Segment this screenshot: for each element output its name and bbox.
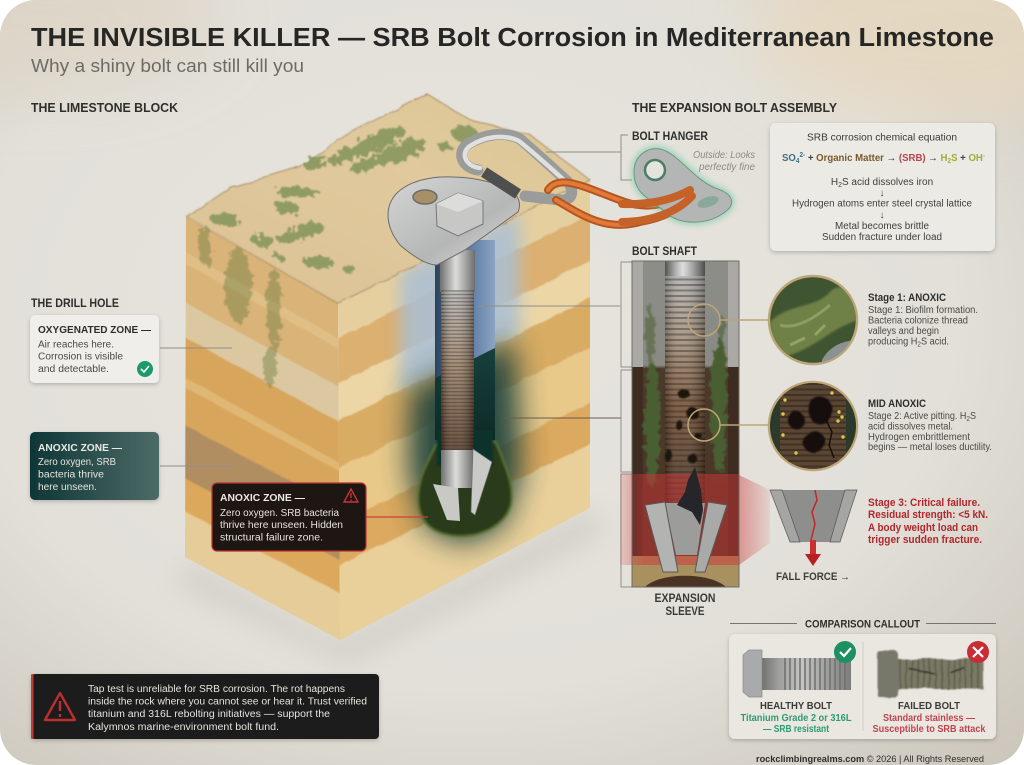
block shadow — [178, 512, 600, 660]
equation formula: 2 — [947, 158, 951, 165]
panel: anoxic zone left: Zero oxygen, SRB — [38, 457, 116, 468]
reaction chain: Metal becomes brittle — [835, 221, 929, 232]
note: outside looks fine — [693, 149, 756, 173]
panel: tap test warning: titanium and 316L rebolting initiatives — support the — [88, 709, 330, 720]
stage 3 text: Stage 3: Critical failure. — [868, 497, 980, 509]
icon: failed cross — [967, 641, 989, 663]
stage 2 text: S — [970, 411, 976, 422]
stage 3 text — [868, 497, 988, 546]
shaft outline — [632, 261, 739, 587]
stage 3 text: A body weight load can — [868, 522, 978, 534]
equation formula: SO — [782, 152, 796, 164]
failed bolt text: Susceptible to SRB attack — [872, 724, 986, 735]
label: expansion sleeve — [654, 593, 716, 618]
panel: anoxic zone callout — [212, 483, 366, 551]
panel: oxygenated zone: Air reaches here. — [38, 340, 114, 350]
equation formula: + — [805, 152, 816, 164]
panel: oxygenated zone — [30, 315, 159, 383]
callout lens links — [688, 304, 770, 441]
panel: anoxic zone left — [30, 432, 159, 500]
biofilm on walls — [644, 303, 727, 487]
equation formula: + OH — [960, 152, 984, 164]
panel: oxygenated zone: and detectable. — [38, 364, 109, 375]
stage 1 text: S acid. — [921, 336, 949, 348]
rock walls — [632, 261, 739, 587]
panel: anoxic zone callout: Zero oxygen. SRB bacteria — [220, 508, 339, 519]
fracture detail — [770, 490, 857, 542]
corrosion pits — [665, 389, 702, 463]
equation formula: 2- — [799, 152, 806, 159]
reaction chain: H — [831, 177, 838, 188]
stage 3 text: Residual strength: <5 kN. — [868, 509, 988, 521]
moss patches — [210, 121, 477, 273]
panel: tap test warning: inside the rock where you cannot see or hear it. Trust verified — [88, 696, 367, 708]
stage 1 text: Stage 1: ANOXIC — [868, 292, 946, 304]
stage 2 text: MID ANOXIC — [868, 398, 926, 410]
reaction chain: Hydrogen atoms enter steel crystal lattice — [792, 198, 972, 210]
panel: tap test warning — [31, 674, 379, 739]
anoxic glow in rock — [408, 342, 522, 545]
label: bolt shaft: BOLT SHAFT — [632, 244, 698, 258]
healthy bolt text: — SRB resistant — [763, 724, 830, 735]
magnified biofilm circle — [769, 276, 860, 370]
label: bolt hanger: BOLT HANGER — [632, 129, 708, 143]
panel: oxygenated zone: OXYGENATED ZONE — — [38, 324, 151, 336]
subtitle: Why a shiny bolt can still kill you — [31, 56, 304, 76]
panel: chemical equation — [770, 123, 995, 251]
label: the drill hole: THE DRILL HOLE — [31, 296, 119, 310]
sediment floor — [632, 556, 739, 587]
panel: anoxic zone left: ANOXIC ZONE — — [38, 442, 122, 454]
panel: anoxic zone left: here unseen. — [38, 482, 97, 493]
equation formula: 4 — [796, 158, 800, 165]
stage 2 text — [868, 398, 992, 453]
reaction chain: ↓ — [880, 210, 884, 221]
stage 2 text: Hydrogen embrittlement — [868, 432, 970, 443]
failed bolt text: Standard stainless — — [883, 713, 975, 724]
expansion sleeve flaps — [645, 502, 678, 572]
heading: comparison callout: COMPARISON CALLOUT — [805, 618, 920, 630]
leader lines from left cards — [160, 348, 234, 466]
failed bolt text — [872, 700, 986, 735]
stage 1 text: Stage 1: Biofilm formation. — [868, 305, 978, 316]
red critical zone overlay — [620, 474, 739, 565]
note: outside looks fine: perfectly fine — [698, 161, 755, 173]
bolt in rock — [433, 250, 492, 521]
stage 1 text: valleys and begin — [868, 326, 939, 337]
panel: comparison — [729, 634, 996, 739]
shaft cross-section diagram — [620, 261, 739, 587]
icon: green check — [137, 361, 153, 377]
stage 3 text: trigger sudden fracture. — [868, 534, 982, 546]
icon: hanger close-up — [622, 149, 732, 222]
bracket: bolt hanger leader — [546, 135, 632, 180]
oxygenated pale blue zone — [400, 212, 520, 392]
fracture tear — [677, 467, 703, 525]
callout link to anoxic zone — [366, 516, 428, 518]
icon: healthy check — [834, 641, 856, 663]
stage 1 text: Bacteria colonize thread — [868, 316, 968, 326]
stage 1 text: 2 — [917, 342, 921, 348]
healthy bolt text: HEALTHY BOLT — [760, 700, 833, 712]
note: outside looks fine: Outside: Looks — [693, 149, 756, 161]
block right face strata — [338, 180, 590, 640]
reaction chain: 2 — [838, 182, 842, 189]
equation formula: S — [951, 152, 957, 164]
stage 1 text: producing H — [868, 336, 922, 348]
block left face strata — [185, 217, 340, 640]
red wedge to fracture detail — [739, 475, 770, 565]
heading: the expansion bolt assembly: THE EXPANSION BOLT ASSEMBLY — [632, 101, 838, 115]
stage 2 text: 2 — [966, 416, 970, 423]
bolt hanger plate — [388, 177, 519, 265]
footer credit: rockclimbingrealms.com © 2026 | All Rights Reserved — [756, 754, 984, 765]
panel: anoxic zone callout: structural failure zone. — [220, 532, 323, 544]
panel: anoxic zone callout: ANOXIC ZONE — — [220, 492, 305, 504]
healthy bolt illustration — [743, 650, 851, 697]
biofilm and sleeve — [418, 430, 512, 536]
leaders: shaft brackets — [478, 262, 632, 587]
icon: warning triangle — [344, 489, 358, 502]
failed bolt illustration — [877, 651, 983, 697]
sleeve centre — [665, 503, 705, 555]
drill hole upper — [435, 240, 495, 440]
stage 2 text: acid dissolves metal. — [868, 422, 953, 432]
threaded bolt — [665, 261, 705, 521]
label: expansion sleeve: SLEEVE — [666, 606, 705, 618]
panel: anoxic zone callout: thrive here unseen. Hidden — [220, 520, 343, 531]
title: THE INVISIBLE KILLER — SRB Bolt Corrosion in Mediterranean Limestone — [31, 24, 994, 52]
arrow: fall force — [805, 540, 821, 566]
equation formula: - — [983, 153, 986, 160]
carabiner — [462, 134, 572, 200]
heading: the limestone block: THE LIMESTONE BLOCK — [31, 101, 178, 115]
panel: tap test warning: Tap test is unreliable for SRB corrosion. The rot happens — [88, 684, 345, 695]
panel: tap test warning: Kalymnos marine-environment bolt fund. — [88, 722, 279, 733]
reaction chain: ↓ — [880, 188, 884, 199]
block top face — [187, 94, 590, 303]
healthy bolt text: Titanium Grade 2 or 316L — [740, 713, 852, 724]
reaction chain: S acid dissolves iron — [842, 177, 933, 188]
orange rope sling — [548, 182, 692, 225]
magnified pitting circle — [769, 382, 857, 470]
reaction chain: Sudden fracture under load — [822, 232, 942, 243]
healthy bolt text — [740, 700, 852, 735]
failed bolt text: FAILED BOLT — [898, 700, 961, 712]
moss streaks on left face — [198, 225, 281, 387]
limestone block illustration — [170, 94, 600, 660]
stage 2 text: Stage 2: Active pitting. H — [868, 411, 977, 422]
panel: anoxic zone left: bacteria thrive — [38, 470, 104, 480]
label: fall force: FALL FORCE → — [776, 571, 850, 583]
equation heading: SRB corrosion chemical equation — [807, 132, 957, 144]
panel: oxygenated zone: Corrosion is visible — [38, 352, 123, 362]
stage 2 text: begins — metal loses ductility. — [868, 442, 992, 453]
stage 1 text — [868, 292, 978, 348]
icon: warning — [45, 693, 75, 720]
label: expansion sleeve: EXPANSION — [654, 593, 716, 605]
reaction chain — [792, 177, 972, 243]
equation formula: Organic Matter → (SRB) → H — [816, 152, 948, 164]
